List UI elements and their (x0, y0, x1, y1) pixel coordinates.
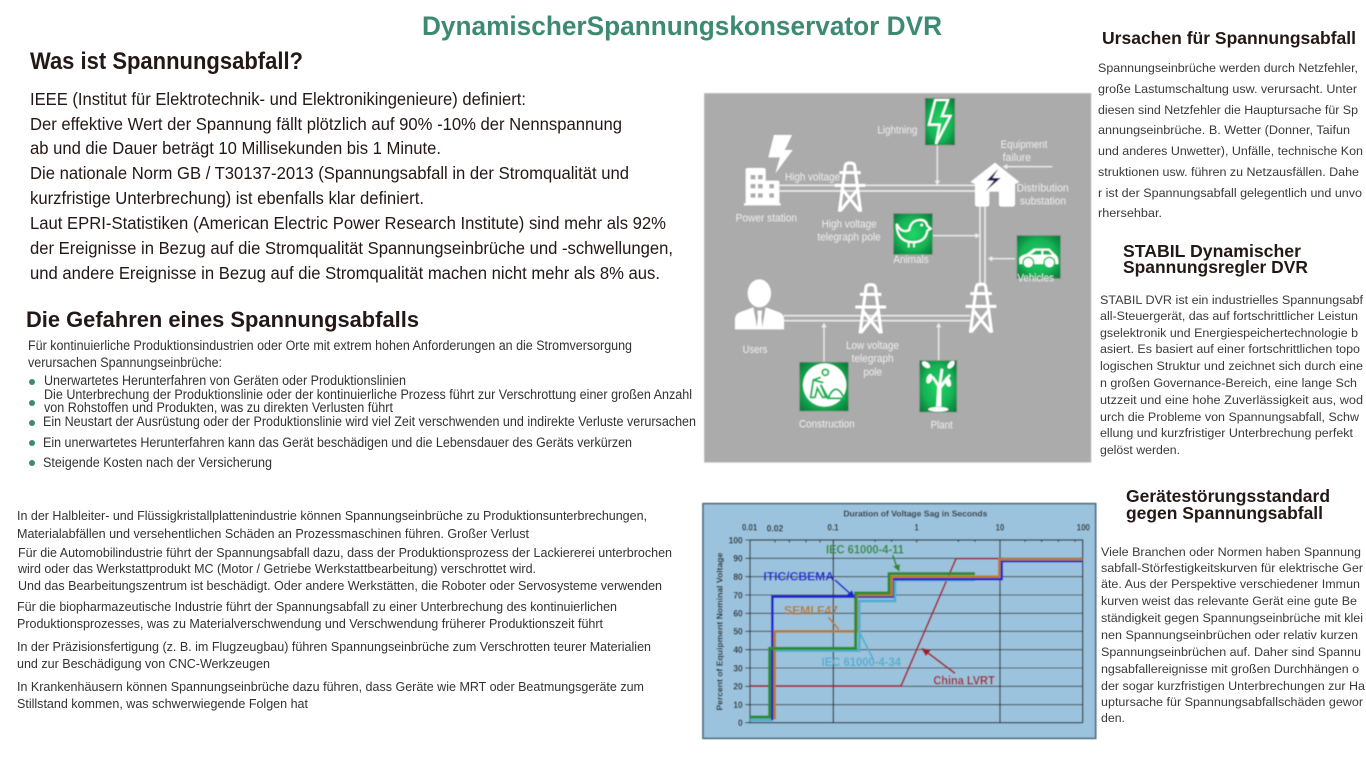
text block: Gerätestörungsstandard: uptursache für Spannungsabfallschäden gewor (1101, 695, 1363, 709)
text block: definition: ab und die Dauer beträgt 10 Millisekunden bis 1 Minute. (30, 138, 441, 158)
diagram labels: Plant (931, 419, 953, 431)
text block: STABIL DVR (1100, 293, 1364, 457)
diagram: causes of voltage sag (704, 93, 1091, 462)
text block: Branchenbeispiele: Und das Bearbeitungszentrum ist beschädigt. Oder andere Werkstätten, die Roboter oder Servosysteme verwenden (18, 578, 662, 593)
chart labels: 100 (729, 535, 743, 545)
text block: Branchenbeispiele: und zur Beschädigung von CNC-Werkzeugen (17, 656, 270, 671)
chart labels: ITIC/CBEMA (763, 571, 835, 584)
text block: Gerätestörungsstandard: äte. Aus der Perspektive verschiedener Immun (1101, 577, 1360, 591)
icon: construction (799, 362, 849, 411)
text block: definition: Die nationale Norm GB / T30137-2013 (Spannungsabfall in der Stromqualität und (30, 163, 629, 183)
diagram labels: Users (743, 344, 767, 356)
text block: Ursachen: und anderes Unwetter), Unfälle, technische Kon (1098, 144, 1363, 158)
text block: Ursachen: Spannungseinbrüche werden durch Netzfehler, (1098, 61, 1358, 75)
text block: STABIL DVR: asiert. Es basiert auf einer fortschrittlichen topo (1100, 342, 1360, 356)
text block: STABIL DVR: n großen Governance-Bereich, eine lange Sch (1100, 376, 1357, 390)
text block: Branchenbeispiele: Für die biopharmazeutische Industrie führt der Spannungsabfall zu einer Unterbrechung des kontinuierlichen (17, 599, 617, 614)
text block: definition: und andere Ereignisse in Bezug auf die Stromqualität machen nicht mehr als 8% aus. (30, 263, 660, 283)
text block: Branchenbeispiele: In der Halbleiter- und Flüssigkristallplattenindustrie können Spannungseinbrüche zu Produktionsunterbrechungen, (17, 508, 647, 523)
text block: Gefahren intro: verursachen Spannungseinbrüche: (28, 355, 222, 370)
icon: users (735, 279, 784, 329)
diagram labels: Construction (799, 419, 855, 431)
heading: Gerätestörungsstandard: Gerätestörungsstandard (1126, 486, 1330, 506)
text block: Ursachen: große Lastumschaltung usw. verursacht. Unter (1098, 82, 1357, 96)
text block: Branchenbeispiele: Stillstand kommen, was schwerwiegende Folgen hat (17, 696, 308, 711)
icon: low voltage tower (855, 285, 886, 333)
text block: definition: IEEE (Institut für Elektrotechnik- und Elektronikingenieure) definiert: (30, 89, 526, 109)
text block: Branchenbeispiele: Für die Automobilindustrie führt der Spannungsabfall dazu, dass der Produktionsprozess der Lackiererei unterbrochen (18, 545, 672, 560)
diagram labels: telegraph pole (817, 232, 881, 244)
bullet list: Gefahren: Unerwartetes Herunterfahren von Geräten oder Produktionslinien (44, 373, 406, 388)
chart labels: 30 (733, 663, 743, 673)
chart labels: 10 (733, 700, 743, 710)
text block: Gerätestörungsstandard: ngsabfallereignisse mit großen Durchhängen o (1101, 662, 1359, 676)
curve: China LVRT (750, 559, 1083, 686)
icon: corner tower (966, 284, 996, 333)
text block: Branchenbeispiele: wird oder das Werkstattprodukt MC (Motor / Getriebe Werkstattbearbeitung) verschrottet wird. (17, 561, 536, 576)
icon: power station (744, 135, 793, 205)
text block: Branchenbeispiele: Produktionsprozesses, was zu Materialverschwendung und Verschwendung früherer Produktionszeit führt (17, 616, 603, 631)
text block: STABIL DVR: gelöst werden. (1100, 443, 1180, 457)
diagram labels: Distribution (1017, 182, 1069, 194)
chart labels: China LVRT (933, 674, 995, 687)
heading: Gerätestörungsstandard (1126, 486, 1330, 523)
chart labels: 0.1 (827, 523, 839, 533)
text block: STABIL DVR: STABIL DVR ist ein industrielles Spannungsabf (1100, 293, 1364, 307)
chart labels: 50 (733, 627, 743, 637)
chart annotation arrows (828, 555, 955, 673)
diagram labels: failure (1003, 152, 1031, 164)
panel: Gefahren (26, 307, 696, 470)
chart labels: 40 (733, 645, 743, 655)
text block: Ursachen: rhersehbar. (1098, 206, 1162, 220)
icon: plant (919, 359, 957, 412)
chart labels: IEC 61000-4-34 (822, 656, 901, 669)
chart labels: 1 (915, 523, 919, 533)
chart labels: 100 (1077, 523, 1090, 533)
icon: animals (893, 213, 933, 255)
text block: Branchenbeispiele (17, 508, 672, 711)
text block: STABIL DVR: utzzeit und eine hohe Zuverlässigkeit aus, wod (1100, 393, 1363, 407)
diagram labels: Animals (893, 254, 929, 266)
chart labels: 20 (733, 682, 743, 692)
curve: IEC 61000-4-11 (750, 574, 975, 717)
diagram labels: Low voltage (846, 340, 899, 352)
panel: Gerätestörungsstandard (1101, 486, 1365, 725)
text block: Gerätestörungsstandard: den. (1101, 711, 1125, 725)
text block: Gerätestörungsstandard: Spannungseinbrüchen auf. Daher sind Spannu (1101, 645, 1361, 659)
chart labels: 0 (738, 718, 743, 728)
text block: STABIL DVR: gselektronik und Energiespeichertechnologie b (1100, 326, 1358, 340)
panel: Ursachen (1098, 28, 1363, 220)
diagram labels: Power station (736, 212, 797, 224)
heading: STABIL DVR (1123, 241, 1308, 277)
chart labels: 10 (996, 523, 1004, 533)
text block: definition (30, 89, 673, 283)
text block: Ursachen: struktionen usw. führen zu Netzausfällen. Dahe (1098, 165, 1359, 179)
heading: Gerätestörungsstandard: gegen Spannungsabfall (1126, 503, 1323, 523)
chart labels: 0.02 (767, 523, 783, 533)
chart labels: 70 (733, 590, 743, 600)
text block: Gerätestörungsstandard: nen Spannungseinbrüchen oder relativ kurzen (1101, 628, 1358, 642)
text block: Gefahren intro: Für kontinuierliche Produktionsindustrien oder Orte mit extrem hohen Anforderungen an die Stromversorgung (28, 338, 632, 353)
bullet list: Gefahren: Steigende Kosten nach der Versicherung (43, 455, 272, 470)
text block: definition: Der effektive Wert der Spannung fällt plötzlich auf 90% -10% der Nennspannung (30, 114, 622, 134)
text block: Ursachen: r ist der Spannungsabfall gelegentlich und unvo (1098, 186, 1362, 200)
icon: vehicles (1017, 235, 1061, 279)
bullet list: Gefahren: Ein Neustart der Ausrüstung oder der Produktionslinie wird viel Zeit verschwenden und indirekte Verluste verursachen (43, 414, 696, 429)
text block: Gefahren intro (28, 338, 632, 370)
diagram labels: telegraph (852, 353, 894, 365)
text block: Gerätestörungsstandard: Viele Branchen oder Normen haben Spannung (1101, 545, 1361, 559)
diagram labels: Lightning (877, 125, 917, 137)
bullet list: Gefahren: Ein unerwartetes Herunterfahren kann das Gerät beschädigen und die Lebensdauer des Geräts verkürzen (43, 435, 632, 450)
text block: STABIL DVR: urch die Probleme von Spannungsabfall, Schw (1100, 410, 1359, 424)
diagram labels: High voltage (822, 219, 877, 231)
icon: lightning (925, 98, 955, 145)
text block: Gerätestörungsstandard: der sogar kurzfristigen Unterbrechungen zur Ha (1101, 679, 1365, 693)
panel: STABIL DVR (1100, 241, 1364, 457)
arrows (821, 145, 1052, 362)
chart labels (714, 509, 1090, 728)
text block: STABIL DVR: all-Steuergerät, das auf fortschrittlicher Leistun (1100, 309, 1358, 323)
curve: IEC 61000-4-34 (750, 580, 975, 720)
title: DynamischerSpannungskonservator DVR (422, 11, 942, 41)
chart grid (745, 540, 1083, 723)
text block: Branchenbeispiele: In der Präzisionsfertigung (z. B. im Flugzeugbau) führen Spannungseinbrüche zum Verschrotten teurer Materialien (17, 639, 651, 654)
diagram labels: Vehicles (1017, 273, 1054, 285)
text block: Gerätestörungsstandard: ständigkeit gegen Spannungseinbrüche mit klei (1101, 611, 1363, 625)
text block: STABIL DVR: logischen Struktur und zeichnet sich durch eine (1100, 359, 1363, 373)
text block: Branchenbeispiele: In Krankenhäusern können Spannungseinbrüche dazu führen, dass Geräte wie MRT oder Beatmungsgeräte zum (17, 679, 644, 694)
text block: STABIL DVR: ellung und kurzfristiger Unterbrechung perfekt (1100, 426, 1354, 440)
text block: Gerätestörungsstandard (1101, 545, 1365, 725)
chart labels: Duration of Voltage Sag in Seconds (843, 509, 987, 519)
chart labels: 80 (733, 572, 743, 582)
text block: Branchenbeispiele: Materialabfällen und versehentlichen Schäden an Prozessmaschinen führen. Großer Verlust (17, 526, 529, 541)
text block: Ursachen: diesen sind Netzfehler die Hauptursache für Sp (1098, 103, 1358, 117)
chart labels: 90 (733, 554, 743, 564)
text block: definition: kurzfristige Unterbrechung) ist ebenfalls klar definiert. (30, 188, 424, 208)
chart labels: SEMI F47 (784, 604, 838, 617)
bullet list: Gefahren: Die Unterbrechung der Produktionslinie oder der kontinuierliche Prozess führt zur Verschrottung einer großen Anzahl (44, 387, 692, 402)
heading: Gefahren: Die Gefahren eines Spannungsabfalls (26, 307, 419, 332)
heading: was ist Spannungsabfall: Was ist Spannungsabfall? (30, 48, 303, 75)
icon: high voltage tower (835, 163, 865, 212)
icon: distribution substation (970, 163, 1019, 207)
diagram labels: High voltage (785, 171, 840, 183)
diagram labels: Equipment (1001, 139, 1047, 151)
curve: ITIC/CBEMA (772, 561, 1083, 720)
diagram labels: pole (863, 366, 882, 378)
text block: Gerätestörungsstandard: sabfall-Störfestigkeitskurven für elektrische Ger (1101, 561, 1363, 575)
chart: voltage sag immunity curves (703, 504, 1096, 738)
bullet list: Gefahren: von Rohstoffen und Produkten, was zu direkten Verlusten führt (44, 400, 393, 415)
chart labels: 60 (733, 609, 743, 619)
heading: STABIL DVR: Spannungsregler DVR (1123, 257, 1308, 277)
chart labels: Percent of Equipment Nominal Voltage (714, 552, 724, 711)
chart labels: IEC 61000-4-11 (826, 543, 904, 556)
chart labels: 0.01 (742, 523, 757, 533)
panel: was ist Spannungsabfall (30, 48, 673, 283)
heading: Ursachen: Ursachen für Spannungsabfall (1102, 28, 1356, 48)
text block: definition: der Ereignisse in Bezug auf die Stromqualität Spannungseinbrüche und -schwellungen, (30, 238, 673, 258)
text block: Ursachen: annungseinbrüche. B. Wetter (Donner, Taifun (1098, 123, 1350, 137)
bullet list: Gefahren (29, 373, 696, 470)
heading: STABIL DVR: STABIL Dynamischer (1123, 241, 1301, 261)
diagram labels (736, 125, 1069, 431)
text block: Gerätestörungsstandard: kurven weist das relevante Gerät eine gute Be (1101, 594, 1357, 608)
curve: SEMI F47 (775, 559, 1083, 719)
diagram labels: substation (1020, 195, 1066, 207)
text block: definition: Laut EPRI-Statistiken (American Electric Power Research Institute) sind mehr als 92% (30, 213, 666, 233)
text block: Ursachen (1098, 61, 1363, 220)
